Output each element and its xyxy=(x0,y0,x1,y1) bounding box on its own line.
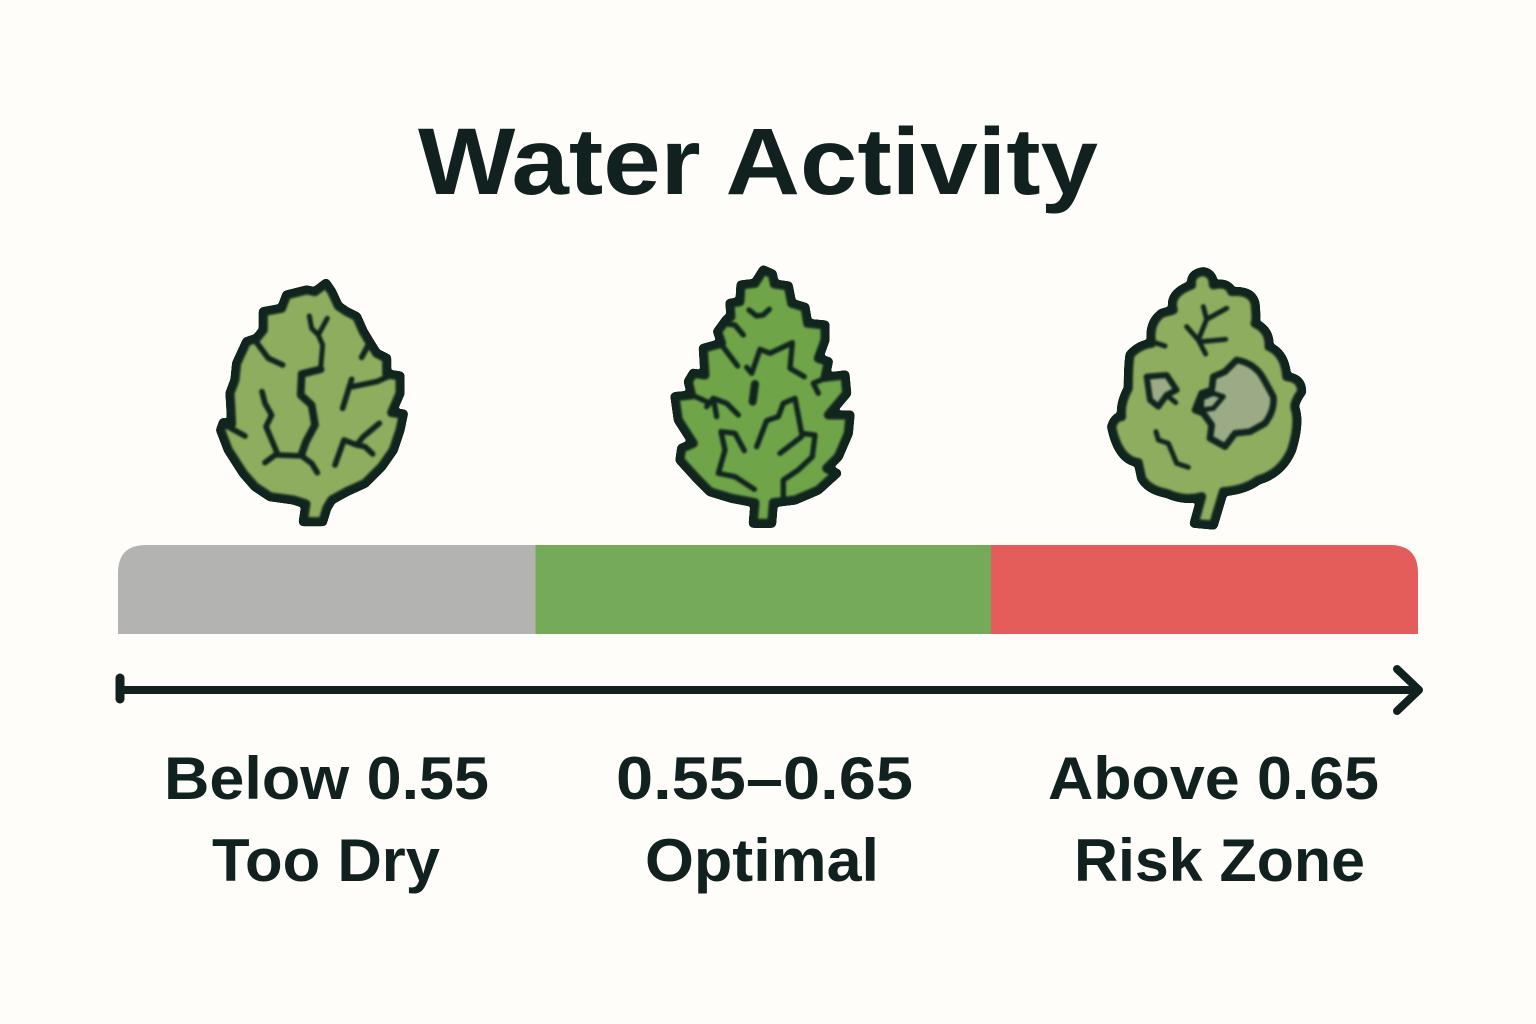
icon: dry cracked bud xyxy=(221,283,403,522)
segment: too dry xyxy=(118,545,536,634)
label: too dry: Below 0.55 xyxy=(164,745,489,812)
label: optimal: Optimal xyxy=(645,827,879,894)
label: too dry xyxy=(164,745,489,894)
icon: moldy risk bud xyxy=(1112,272,1302,525)
segment: risk zone xyxy=(991,545,1418,634)
title: Water Activity xyxy=(418,109,1098,215)
label: optimal: 0.55–0.65 xyxy=(616,745,913,812)
scale bar xyxy=(118,545,1418,634)
label: too dry: Too Dry xyxy=(212,827,441,894)
label: risk zone xyxy=(1048,745,1379,894)
segment: optimal xyxy=(536,545,991,634)
label: risk zone: Above 0.65 xyxy=(1048,745,1379,812)
label: risk zone: Risk Zone xyxy=(1074,827,1365,894)
label: optimal xyxy=(616,745,913,894)
icon: optimal green bud xyxy=(675,270,850,523)
arrow: water activity axis xyxy=(120,669,1419,711)
